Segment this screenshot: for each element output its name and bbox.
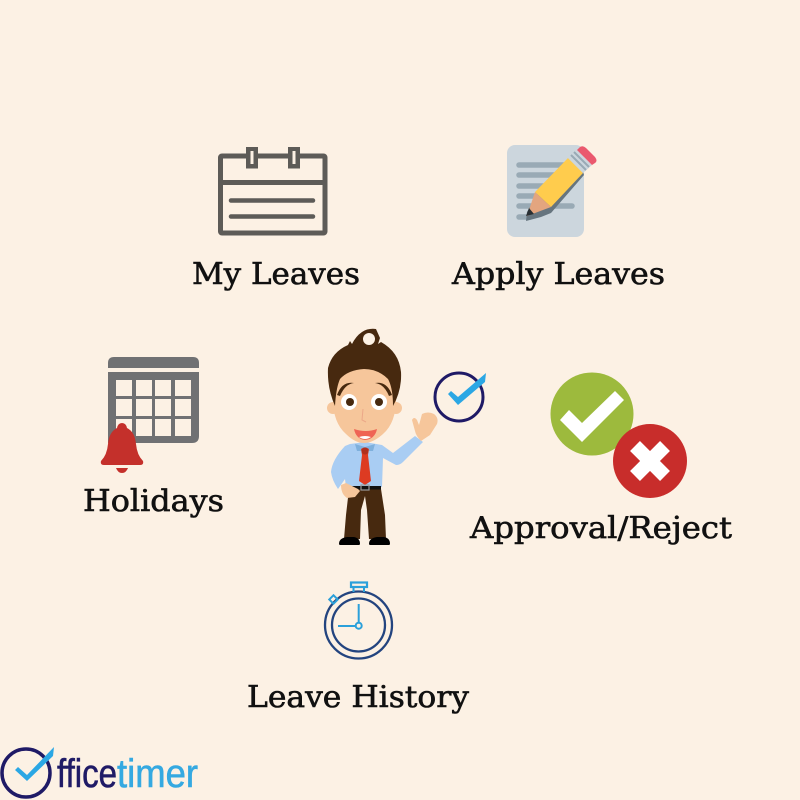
belt bbox=[349, 486, 381, 490]
panel: holidays bbox=[83, 357, 224, 519]
shirt bbox=[331, 436, 423, 489]
nose bbox=[362, 409, 366, 422]
panel: my leaves bbox=[192, 147, 360, 292]
ears and face bbox=[327, 402, 339, 414]
icon: stopwatch bbox=[325, 582, 392, 658]
eyes bbox=[341, 394, 357, 410]
logo: officetimer bbox=[2, 747, 198, 797]
logo mark bbox=[2, 747, 54, 797]
logo text: ffice: ffice bbox=[57, 752, 117, 796]
label: holidays: Holidays bbox=[83, 484, 224, 519]
icon: wall calendar bbox=[220, 147, 325, 233]
label: apply leaves: Apply Leaves bbox=[451, 257, 665, 292]
icon: calendar with bell bbox=[101, 357, 199, 473]
icon: check badge bbox=[435, 373, 486, 421]
waving hand bbox=[412, 412, 438, 441]
icon: green check circle bbox=[550, 372, 634, 456]
icon: red cross circle bbox=[613, 424, 687, 498]
icon: pencil on document bbox=[507, 145, 596, 237]
label: approval reject: Approval/Reject bbox=[469, 511, 732, 546]
label: my leaves: My Leaves bbox=[192, 257, 360, 292]
hair bbox=[328, 329, 401, 406]
panel: apply leaves bbox=[451, 145, 665, 292]
illustration: office worker waving bbox=[327, 329, 438, 545]
panel: approval or reject bbox=[469, 372, 732, 546]
eyebrows bbox=[337, 383, 354, 396]
tie bbox=[359, 448, 371, 485]
mouth bbox=[354, 429, 377, 440]
label: leave history: Leave History bbox=[247, 680, 469, 715]
logo text: timer: timer bbox=[117, 752, 198, 796]
hand on hip bbox=[341, 483, 360, 498]
legs bbox=[344, 489, 386, 539]
panel: leave history bbox=[247, 582, 469, 715]
